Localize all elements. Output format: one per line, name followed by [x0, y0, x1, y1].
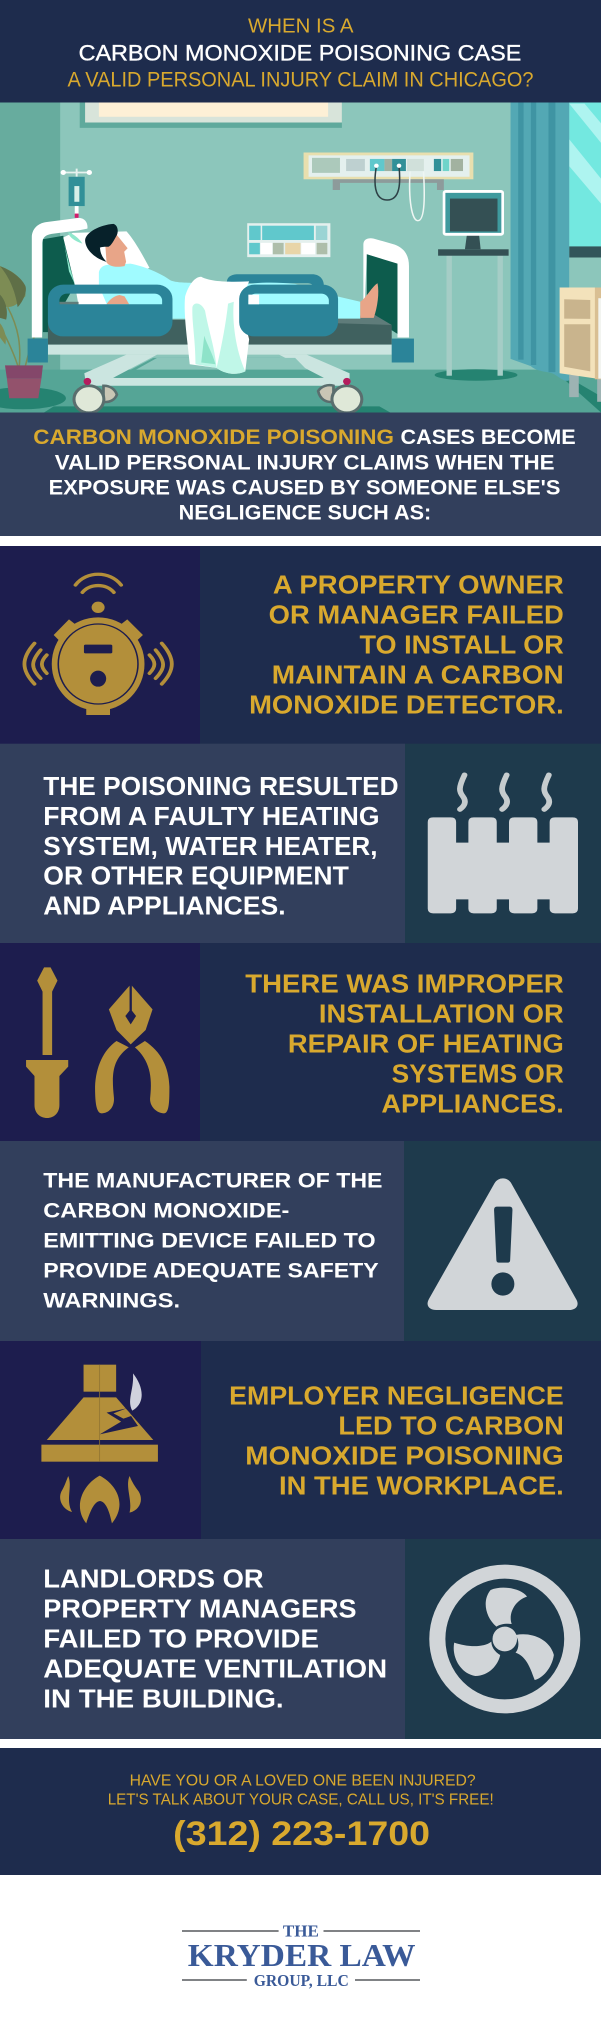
- text: faulty heating: AND APPLIANCES.: [43, 893, 286, 921]
- icon: carbon monoxide detector: [24, 574, 172, 715]
- illustration: patient in hospital bed: [0, 102, 601, 413]
- front bed rail: [48, 285, 172, 336]
- text: manufacturer warnings: [43, 1169, 383, 1313]
- logo: The Kryder Law Group: KRYDER LAW: [188, 1937, 416, 1973]
- text: employer negligence: MONOXIDE POISONING: [245, 1442, 564, 1470]
- text: faulty heating: [43, 773, 399, 921]
- bedside cabinet: [560, 287, 601, 402]
- text: employer negligence: [229, 1382, 564, 1500]
- text: improper installation: INSTALLATION OR: [319, 1000, 564, 1028]
- text: manufacturer warnings: CARBON MONOXIDE-: [43, 1199, 289, 1223]
- intro text: CARBON MONOXIDE POISONING: [33, 425, 394, 449]
- intro panel: [0, 412, 601, 536]
- text: property owner: MONOXIDE DETECTOR.: [249, 692, 564, 720]
- call to action text: LET'S TALK ABOUT YOUR CASE, CALL US, IT'S FREE!: [108, 1791, 494, 1808]
- panel: improper installation: [0, 943, 601, 1141]
- text: improper installation: APPLIANCES.: [381, 1091, 564, 1119]
- text: ventilation: LANDLORDS OR: [43, 1565, 264, 1593]
- text: property owner: MAINTAIN A CARBON: [272, 662, 564, 690]
- blanket: [185, 277, 249, 374]
- wall equipment panel: [304, 152, 473, 221]
- monitor on table: [435, 190, 517, 381]
- text: faulty heating: FROM A FAULTY HEATING: [43, 803, 380, 831]
- panel: faulty heating system: [0, 744, 601, 943]
- intro text: VALID PERSONAL INJURY CLAIMS WHEN THE: [55, 451, 555, 475]
- text: improper installation: SYSTEMS OR: [392, 1061, 564, 1089]
- title: WHEN IS A: [248, 14, 354, 38]
- text: faulty heating: THE POISONING RESULTED: [43, 773, 399, 801]
- text: ventilation: PROPERTY MANAGERS: [43, 1595, 357, 1623]
- text: ventilation: FAILED TO PROVIDE: [43, 1625, 319, 1653]
- logo: The Kryder Law Group: GROUP, LLC: [254, 1971, 349, 1990]
- text: ventilation: IN THE BUILDING.: [43, 1685, 284, 1713]
- text: employer negligence: EMPLOYER NEGLIGENCE: [229, 1382, 564, 1410]
- icon: warning triangle: [428, 1178, 578, 1310]
- text: property owner: TO INSTALL OR: [360, 632, 564, 660]
- text: faulty heating: SYSTEM, WATER HEATER,: [43, 833, 378, 861]
- text: employer negligence: LED TO CARBON: [338, 1412, 564, 1440]
- title: [68, 14, 534, 91]
- panel: property owner failed to install detector: [0, 546, 601, 744]
- curtain: [511, 102, 569, 381]
- text: manufacturer warnings: EMITTING DEVICE FAILED TO: [43, 1229, 376, 1253]
- icon: screwdriver and pliers: [26, 967, 169, 1118]
- panel: inadequate ventilation: [0, 1539, 601, 1739]
- window: [569, 102, 601, 257]
- hospital bed and patient: [28, 218, 414, 413]
- call to action text: [108, 1772, 494, 1808]
- text: faulty heating: OR OTHER EQUIPMENT: [43, 863, 349, 891]
- intro text: [33, 425, 576, 525]
- bed frame underside: [74, 355, 362, 413]
- icon: range hood and flames: [41, 1365, 158, 1523]
- icon: ventilation fan: [437, 1572, 572, 1706]
- text: improper installation: [245, 970, 564, 1119]
- icon: radiator with steam: [428, 775, 578, 913]
- text: property owner: A PROPERTY OWNER: [273, 572, 564, 600]
- IV bag and stand: [61, 169, 92, 218]
- text: property owner: [249, 572, 564, 720]
- header panel: [0, 0, 601, 103]
- text: ventilation: ADEQUATE VENTILATION: [43, 1655, 387, 1683]
- text: improper installation: REPAIR OF HEATING: [288, 1031, 564, 1059]
- intro text: CASES BECOME: [400, 425, 576, 449]
- text: ventilation: [43, 1565, 387, 1713]
- plant: [0, 266, 66, 409]
- call to action panel: [0, 1748, 601, 1875]
- text: manufacturer warnings: WARNINGS.: [43, 1289, 180, 1313]
- text: employer negligence: IN THE WORKPLACE.: [279, 1472, 564, 1500]
- logo: The Kryder Law Group: [182, 1922, 420, 1990]
- title: CARBON MONOXIDE POISONING CASE: [79, 41, 521, 66]
- panel: employer negligence: [0, 1341, 601, 1539]
- call to action text: HAVE YOU OR A LOVED ONE BEEN INJURED?: [130, 1772, 476, 1789]
- title: A VALID PERSONAL INJURY CLAIM IN CHICAGO?: [68, 68, 534, 91]
- phone number: (312) 223-1700: [173, 1815, 430, 1853]
- panel: manufacturer failed to warn: [0, 1141, 601, 1341]
- logo: The Kryder Law Group: THE: [283, 1922, 319, 1941]
- intro text: EXPOSURE WAS CAUSED BY SOMEONE ELSE'S: [49, 476, 560, 500]
- text: manufacturer warnings: THE MANUFACTURER OF THE: [43, 1169, 383, 1193]
- text: improper installation: THERE WAS IMPROPER: [245, 970, 564, 998]
- intro text: NEGLIGENCE SUCH AS:: [179, 501, 431, 525]
- wall switch plate: [247, 223, 330, 257]
- text: property owner: OR MANAGER FAILED: [269, 602, 564, 630]
- text: manufacturer warnings: PROVIDE ADEQUATE SAFETY: [43, 1259, 379, 1283]
